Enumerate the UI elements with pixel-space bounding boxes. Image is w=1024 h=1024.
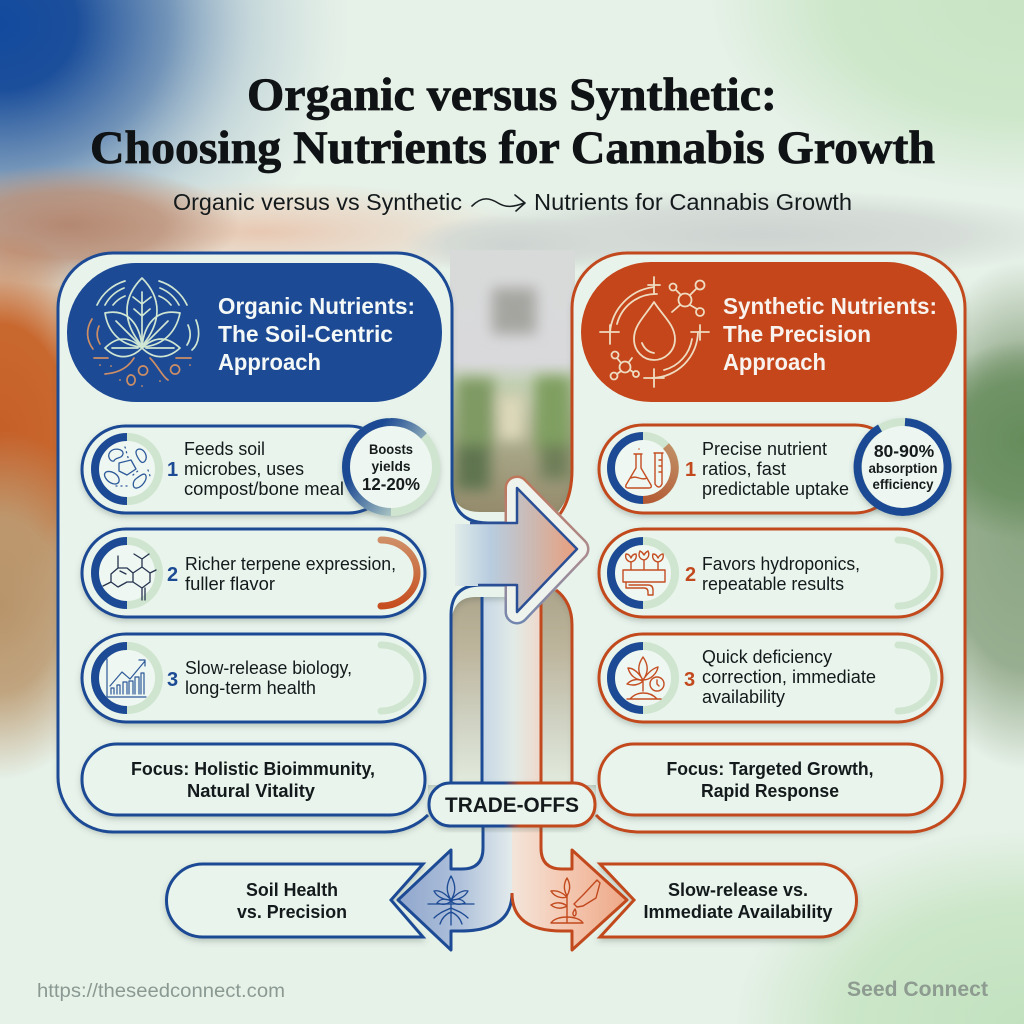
channel lines: [482, 597, 541, 785]
icon: cannabis leaf with soil: [88, 278, 199, 386]
number 1: 1: [685, 459, 696, 481]
stat ring: absorption: efficiency: [872, 477, 934, 492]
text: precise ratios: ratios, fast: [702, 458, 786, 479]
panel outline: [540, 253, 965, 832]
item 1: soil microbes: [82, 422, 436, 513]
stat ring: boosts yields: Boosts: [369, 441, 413, 457]
number 1: 1: [167, 459, 178, 481]
badge: trade-offs: TRADE-OFFS: [445, 794, 579, 817]
stat ring: absorption: [858, 422, 948, 512]
number 2: 2: [167, 564, 178, 586]
stat ring: boosts yields: yields: [372, 458, 411, 474]
panel border: [556, 253, 965, 832]
icon: nutrient drop with molecules: [600, 277, 709, 387]
text: quick correction: Quick deficiency: [702, 646, 833, 667]
header text: synthetic: [723, 293, 937, 375]
header text: organic: Approach: [218, 349, 321, 375]
subtitle with arrow: Organic versus vs Synthetic: [173, 189, 462, 215]
text: slow release: [185, 657, 352, 698]
ring with flask icon: [611, 436, 675, 500]
panel border: [58, 253, 517, 832]
header: organic: [67, 263, 442, 402]
item 2: hydroponics: [599, 529, 942, 617]
item 3: slow release: [82, 634, 425, 722]
text: terpene: fuller flavor: [185, 573, 275, 594]
pill: soil health: Soil Health: [246, 880, 338, 900]
text: feeds soil: [184, 438, 344, 499]
subtitle with arrow: Nutrients for Cannabis Growth: [534, 189, 852, 215]
arc accent: [898, 645, 934, 711]
panel: synthetic nutrients: [540, 253, 965, 832]
footer brand: Seed Connect: [847, 977, 988, 1001]
pill: slow-release: Immediate Availability: [644, 902, 832, 922]
pill: slow-release: [600, 864, 856, 937]
focus: organic: [82, 744, 425, 815]
badge: trade-offs: [429, 783, 595, 826]
text: hydroponics: [702, 553, 860, 594]
header text: organic: The Soil-Centric: [218, 321, 393, 347]
ring with growth chart icon: [95, 646, 159, 710]
text: quick correction: availability: [702, 686, 786, 707]
title: Organic versus Synthetic:: [247, 69, 777, 121]
text: hydroponics: repeatable results: [702, 573, 844, 594]
focus: organic: Natural Vitality: [187, 781, 315, 801]
arc accent: [898, 540, 934, 606]
icon: plant with dropper: [551, 878, 600, 923]
subtitle with arrow: [173, 189, 852, 215]
stat ring: absorption: 80-90%: [874, 441, 935, 461]
connector channel: [482, 590, 541, 900]
focus: synthetic: Rapid Response: [701, 781, 839, 801]
arc accent: [381, 540, 417, 606]
ring with terpene icon: [95, 541, 159, 605]
number 3: 3: [167, 669, 178, 691]
header text: synthetic: Synthetic Nutrients:: [723, 293, 937, 319]
item 2: terpene: [82, 529, 425, 617]
stat ring: boosts yields: 12-20%: [362, 474, 420, 494]
text: precise ratios: Precise nutrient: [702, 438, 827, 459]
header text: organic: Organic Nutrients:: [218, 293, 415, 319]
arrow: organic to synthetic: [455, 488, 577, 612]
text: feeds soil: microbes, uses: [184, 458, 304, 479]
title: [90, 69, 935, 174]
ring with microbes icon: [95, 437, 159, 501]
footer url: https://theseedconnect.com: [37, 980, 285, 1002]
item 3: quick correction: [599, 634, 942, 722]
item 1: precise ratios: [599, 422, 948, 513]
panel: organic nutrients: [58, 253, 520, 832]
panel outline: [58, 253, 520, 832]
arrow: slow-release: [512, 827, 856, 950]
pill: soil health: [166, 864, 423, 937]
number 3: 3: [684, 669, 695, 691]
text: terpene: [185, 553, 396, 594]
arc accent: [381, 645, 417, 711]
text: slow release: Slow-release biology,: [185, 657, 352, 678]
stat ring: boosts yields: [346, 422, 436, 512]
focus: synthetic: Focus: Targeted Growth,: [666, 759, 874, 779]
stat ring: absorption: absorption: [868, 461, 938, 476]
header text: synthetic: The Precision: [723, 321, 871, 347]
text: precise ratios: predictable uptake: [702, 478, 849, 499]
focus: organic: Focus: Holistic Bioimmunity,: [131, 759, 375, 779]
ring with hydroponics icon: [611, 541, 675, 605]
left arrow head: [398, 827, 512, 950]
text: hydroponics: Favors hydroponics,: [702, 553, 860, 574]
text: quick correction: [702, 646, 876, 707]
header text: organic: [218, 293, 415, 375]
text: feeds soil: compost/bone meal: [184, 478, 344, 499]
text: feeds soil: Feeds soil: [184, 438, 265, 459]
title: Choosing Nutrients for Cannabis Growth: [90, 122, 935, 174]
pill: soil health: vs. Precision: [237, 902, 347, 922]
arrow: soil health: [166, 827, 512, 950]
number 2: 2: [685, 564, 696, 586]
ring with plant and clock icon: [611, 646, 675, 710]
header text: synthetic: Approach: [723, 349, 826, 375]
right arrow head: [512, 827, 627, 950]
text: slow release: long-term health: [185, 677, 316, 698]
text: quick correction: correction, immediate: [702, 666, 876, 687]
text: precise ratios: [702, 438, 849, 499]
pill: slow-release: Slow-release vs.: [668, 880, 808, 900]
focus: synthetic: [599, 744, 942, 815]
text: terpene: Richer terpene expression,: [185, 553, 396, 574]
header: synthetic: [581, 262, 957, 402]
icon: plant with roots: [428, 876, 474, 925]
